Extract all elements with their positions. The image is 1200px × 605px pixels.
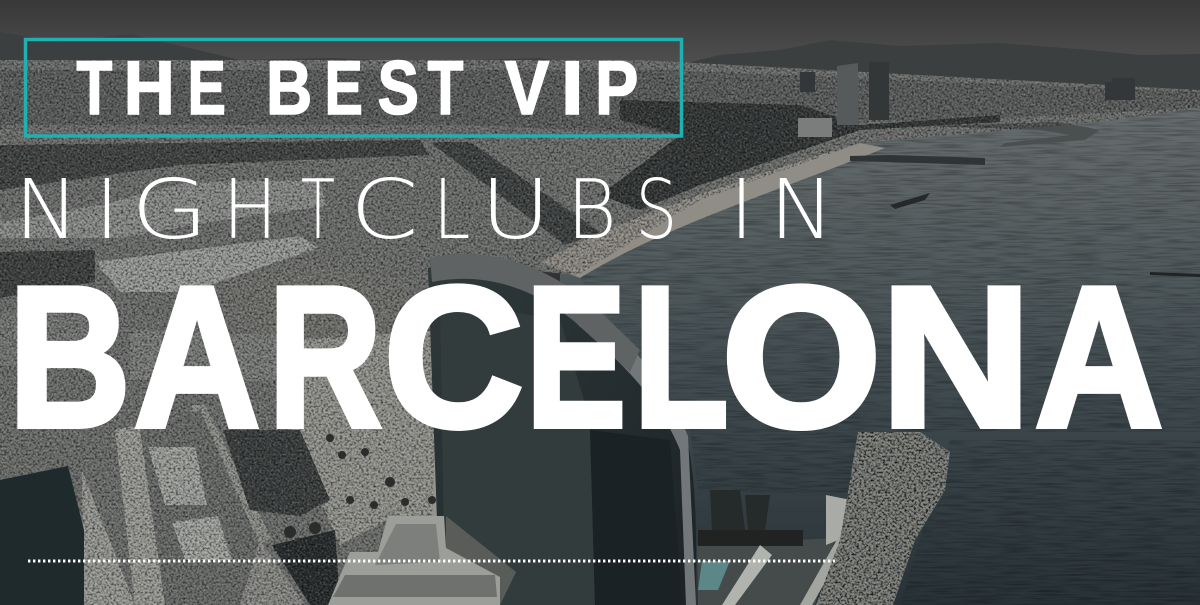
heading: NIGHTCLUBS IN: U — [480, 163, 551, 258]
pool — [698, 561, 730, 590]
heading: THE BEST VIP: T — [428, 46, 463, 131]
heading: NIGHTCLUBS IN: L — [433, 163, 470, 258]
hotel fan base — [446, 516, 516, 605]
low buildings by towers — [798, 118, 832, 137]
heading: THE BEST VIP: V — [505, 46, 550, 131]
heading: THE BEST VIP: I — [561, 46, 584, 131]
promenade plaza — [290, 330, 440, 545]
heading: NIGHTCLUBS IN: N — [14, 163, 79, 258]
palms on terrace — [710, 490, 770, 530]
W hotel tower — [428, 265, 696, 605]
heading: THE BEST VIP: E — [188, 46, 226, 131]
heading: NIGHTCLUBS IN: T — [301, 163, 335, 258]
street strips and buildings — [115, 425, 165, 605]
heading: NIGHTCLUBS IN: G — [131, 163, 208, 258]
heading: BARCELONA: A — [1035, 246, 1163, 469]
marina breakwater — [930, 122, 1100, 147]
heading: NIGHTCLUBS IN: C — [350, 163, 419, 258]
beach — [540, 143, 885, 278]
dark glass building bottom left — [0, 466, 84, 605]
dotted divider — [28, 560, 835, 562]
mountains — [0, 32, 1200, 100]
marina water — [0, 180, 326, 238]
teal title frame — [26, 40, 682, 136]
heading: BARCELONA: N — [881, 246, 1031, 469]
sea — [560, 100, 1200, 605]
breakwater rocks — [816, 432, 950, 605]
hotel podium building — [328, 516, 500, 605]
dark left city band — [0, 140, 430, 190]
jetties — [850, 155, 985, 165]
heading: NIGHTCLUBS IN: N — [769, 163, 835, 258]
buildings at port — [0, 250, 95, 298]
green avenue — [430, 142, 600, 245]
heading: NIGHTCLUBS IN: B — [567, 163, 617, 258]
heading: BARCELONA: B — [9, 246, 131, 469]
heading: BARCELONA: E — [526, 246, 626, 469]
palm trees on the plaza — [284, 434, 436, 538]
skyline right — [800, 72, 1135, 100]
heading: THE BEST VIP: B — [266, 46, 312, 131]
heading: NIGHTCLUBS IN: H — [223, 163, 277, 258]
heading: BARCELONA: C — [384, 246, 524, 469]
twin towers — [837, 63, 858, 125]
heading: THE BEST VIP: E — [324, 46, 363, 131]
heading: THE BEST VIP: S — [378, 46, 419, 131]
dark tree line along coast — [600, 100, 1000, 210]
heading: THE BEST VIP: T — [76, 46, 112, 131]
heading: BARCELONA: A — [134, 246, 260, 469]
sea ripples — [560, 100, 1200, 605]
deck shadow — [698, 530, 803, 546]
heading: NIGHTCLUBS IN: I — [95, 163, 119, 258]
heading: BARCELONA: L — [634, 246, 728, 469]
upper city band — [0, 70, 1200, 135]
heading: BARCELONA: O — [722, 246, 881, 469]
heading: NIGHTCLUBS IN: S — [635, 163, 677, 258]
hotel terrace and pool — [697, 538, 835, 605]
sky — [0, 0, 1200, 85]
heading: THE BEST VIP: H — [124, 46, 175, 131]
pale wall — [722, 545, 772, 605]
heading: NIGHTCLUBS IN: I — [730, 163, 754, 258]
heading: BARCELONA: R — [268, 246, 382, 469]
heading: THE BEST VIP: P — [595, 46, 638, 131]
